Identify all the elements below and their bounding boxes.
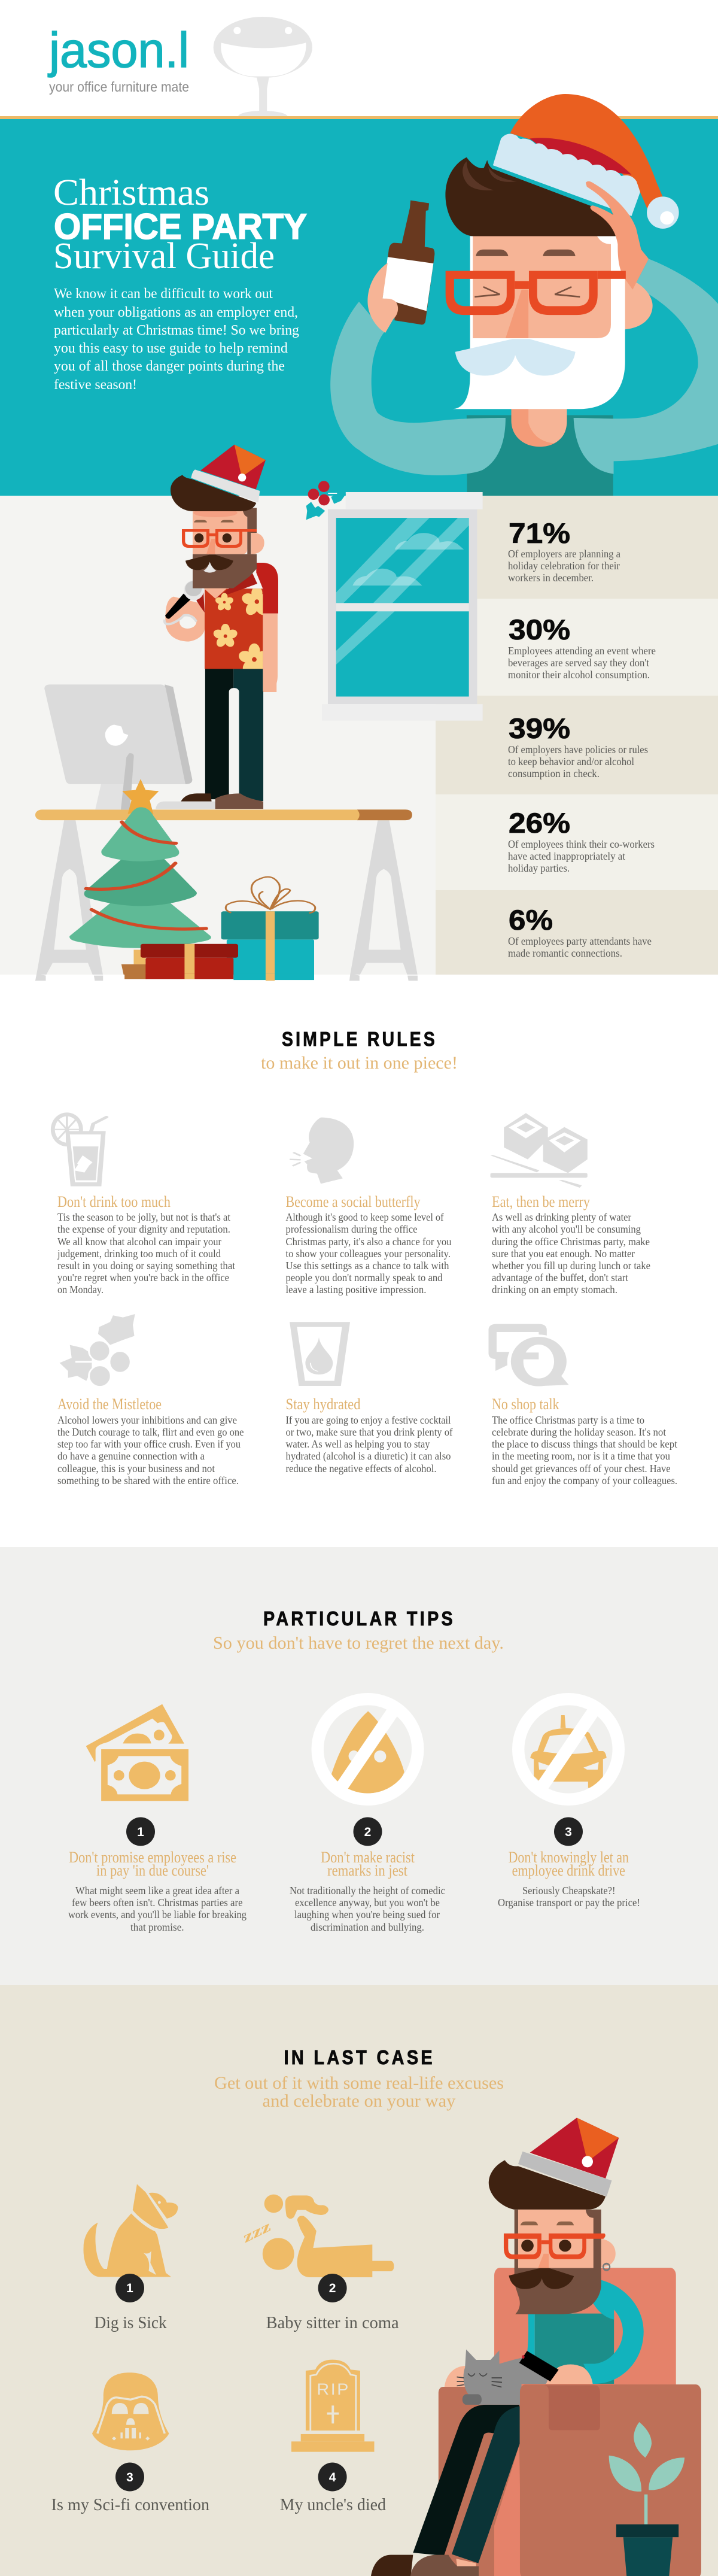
icon: glass of water <box>290 1322 350 1386</box>
number badge 1 <box>126 1818 155 1846</box>
icon: darth vader helmet <box>92 2372 169 2450</box>
stat: 71% <box>477 496 718 599</box>
text: don't drink too much <box>57 1193 235 1295</box>
heading: particular tips: So you don't have to regret the next day. <box>213 1633 504 1653</box>
stat: 6% <box>436 890 718 975</box>
hero intro paragraph: when your obligations as an employer end, <box>54 305 298 320</box>
text: eat, then be merry: during the office Christmas party, make <box>492 1236 650 1248</box>
hero intro paragraph <box>54 286 299 393</box>
text: no shop talk: fun and enjoy the company of your colleagues. <box>492 1474 677 1486</box>
text: don't promise a rise: work events, and you'll be liable for breaking <box>68 1909 247 1920</box>
text: become a social butterfly: people you don't normally speak to and <box>286 1272 443 1284</box>
hero: teal background <box>0 119 718 497</box>
prohibition ring <box>318 1699 418 1800</box>
icon: RIP gravestone: RIP <box>317 2380 348 2398</box>
text: become a social butterfly: to show your colleagues your personality. <box>286 1248 451 1260</box>
heading: simple rules <box>261 1028 458 1073</box>
text: no shop talk: The office Christmas party is a time to <box>492 1414 644 1426</box>
text: don't drink too much: you're regret when you're back in the office <box>57 1272 229 1284</box>
icon: no racist hood <box>318 1699 418 1800</box>
illustration: gift boxes <box>141 877 319 981</box>
text: avoid the mistletoe: something to be shared with the entire office. <box>57 1474 239 1486</box>
illustration: man with microphone <box>165 445 278 809</box>
text: no shop talk: the place to discuss things that should be kept <box>492 1438 677 1450</box>
heading: simple rules: SIMPLE RULES <box>282 1028 437 1050</box>
icon: cocktail <box>51 1112 107 1187</box>
section: particular tips <box>0 1547 718 1985</box>
text: avoid the mistletoe: step too far with your office crush. Even if you <box>57 1438 241 1450</box>
text: don't drink too much: the expense of your dignity and reputation. <box>57 1223 230 1235</box>
text: no shop talk: should get grievances off of your chest. Have <box>492 1463 671 1474</box>
stat: 30%: 30% <box>509 614 570 645</box>
text: become a social butterfly: professionalism during the office <box>286 1223 418 1235</box>
header divider: gold stripe <box>0 116 718 119</box>
text: stay hydrated: reduce the negative effects of alcohol. <box>286 1463 437 1474</box>
text: avoid the mistletoe: Avoid the Mistletoe <box>57 1395 162 1413</box>
illustration: window <box>322 492 483 721</box>
text: don't promise a rise: few beers often isn't. Christmas parties are <box>72 1897 243 1909</box>
hero title <box>53 172 307 277</box>
text: become a social butterfly: Although it's good to keep some level of <box>286 1211 444 1223</box>
hero intro paragraph: festive season! <box>54 377 137 393</box>
heading: particular tips: PARTICULAR TIPS <box>263 1607 455 1630</box>
icon: mistletoe <box>60 1314 135 1386</box>
icon: baby sitter in coma: zzz <box>239 2219 274 2246</box>
text: don't make racist remarks: remarks in jest <box>327 1862 408 1879</box>
heading: in last case <box>214 2046 504 2111</box>
stat: 6%: 6% <box>509 904 553 936</box>
stat: 71%: 71% <box>509 517 570 549</box>
stat: 71%: holiday celebration for their <box>508 560 620 572</box>
text: become a social butterfly: Use this settings as a chance to talk with <box>286 1260 449 1272</box>
text: don't promise a rise <box>68 1849 247 1933</box>
number badge: gravestone: 4 <box>329 2471 336 2484</box>
stat: 39%: consumption in check. <box>508 767 600 779</box>
text: don't drink too much: Tis the season to be jolly, but not is that's at <box>57 1211 230 1223</box>
stat: 71%: workers in december. <box>508 572 594 584</box>
text: don't promise a rise: What might seem like a great idea after a <box>75 1885 239 1897</box>
text: eat, then be merry: advantage of the buffet, don't start <box>492 1272 628 1284</box>
text: don't drink too much: We all know that alcohol can impair your <box>57 1236 221 1248</box>
logo: jason.l wordmark: jason.l <box>47 22 189 78</box>
text: don't drink too much: judgement, drinking too much of it could <box>57 1248 221 1260</box>
text: eat, then be merry <box>492 1193 650 1295</box>
heading: in last case: and celebrate on your way <box>262 2091 456 2111</box>
illustration: desk <box>35 809 418 979</box>
hero title: Christmas <box>53 172 209 213</box>
illustration: computer monitor <box>44 684 226 809</box>
text: don't let employee drink drive: Don't knowingly let an <box>509 1849 629 1866</box>
label: sci-fi convention: Is my Sci-fi convention <box>51 2496 209 2514</box>
text: don't make racist remarks: laughing when you're being sued for <box>294 1909 440 1920</box>
text: don't drink too much: Don't drink too much <box>57 1193 171 1210</box>
car shape <box>530 1715 607 1788</box>
re-drawn base of gifts and desk overlapping the section edge <box>35 974 418 981</box>
stat: 71%: Of employers are planning a <box>508 548 620 560</box>
stats panel <box>436 496 718 975</box>
text: don't make racist remarks <box>290 1849 445 1933</box>
section: in last case <box>0 1985 718 2576</box>
text: don't let employee drink drive: Seriously Cheapskate?! <box>522 1885 615 1897</box>
text: don't let employee drink drive <box>498 1849 640 1909</box>
header: white band <box>0 0 718 116</box>
hero intro paragraph: you of all those danger points during the <box>54 359 285 374</box>
hero title: Survival Guide <box>53 236 275 277</box>
label: dig is sick: Dig is Sick <box>95 2314 167 2332</box>
hood shape <box>331 1711 404 1794</box>
number badge 3 <box>554 1818 583 1846</box>
number badge: vader: 3 <box>126 2471 133 2484</box>
icon: talking head <box>290 1118 354 1184</box>
icon: RIP gravestone <box>291 2360 375 2452</box>
text: no shop talk: No shop talk <box>492 1395 559 1413</box>
stat: 6%: Of employees party attendants have <box>508 935 652 947</box>
number badge: baby sitter: 2 <box>329 2281 336 2295</box>
illustration: Christmas tree <box>69 779 211 979</box>
text: become a social butterfly: Become a social butterfly <box>286 1193 420 1210</box>
text: no shop talk: celebrate during the holiday season. It's not <box>492 1426 666 1438</box>
scene: office background <box>0 496 718 975</box>
label: baby sitter in coma: Baby sitter in coma <box>266 2314 399 2332</box>
upper body: head, hat, shirt and microphone <box>165 445 278 691</box>
heading: in last case: IN LAST CASE <box>284 2046 435 2068</box>
text: eat, then be merry: with any alcohol you'll be consuming <box>492 1223 641 1235</box>
text: don't make racist remarks: Don't make racist <box>321 1849 415 1866</box>
stat: 39%: Of employers have policies or rules <box>508 744 648 755</box>
stat: 26%: have acted inappropriately at <box>508 850 625 862</box>
stat: 26%: 26% <box>509 807 570 839</box>
prohibition ring <box>518 1699 619 1800</box>
number badge: gravestone <box>318 2463 347 2492</box>
text: eat, then be merry: whether you fill up during lunch or take <box>492 1260 650 1272</box>
text: no shop talk: in the meeting room, nor is it a time that you <box>492 1450 670 1462</box>
text: eat, then be merry: Eat, then be merry <box>492 1193 590 1210</box>
text: avoid the mistletoe: the Dutch courage to talk, flirt and even go one <box>57 1426 244 1438</box>
stat: 30%: monitor their alcohol consumption. <box>508 669 650 681</box>
number badge: dog: 1 <box>126 2281 133 2295</box>
heading: particular tips <box>213 1607 504 1653</box>
number badge: baby sitter <box>318 2274 347 2302</box>
label: my uncle's died: My uncle's died <box>280 2496 386 2514</box>
text: eat, then be merry: sure that you eat enough. No matter <box>492 1248 635 1260</box>
stat: 26%: Of employees think their co-workers <box>508 838 655 850</box>
text: no shop talk <box>492 1395 677 1486</box>
text: stay hydrated <box>286 1395 453 1474</box>
text: don't drink too much: on Monday. <box>57 1284 104 1295</box>
text: don't promise a rise: that promise. <box>130 1921 184 1933</box>
heading: simple rules: to make it out in one piece! <box>261 1053 458 1073</box>
hero title: OFFICE PARTY <box>54 207 307 247</box>
text: eat, then be merry: As well as drinking plenty of water <box>492 1211 631 1223</box>
character: santa hipster with beer bottle <box>330 94 718 500</box>
hero intro paragraph: We know it can be difficult to work out <box>54 286 273 302</box>
number badge 3: 3 <box>565 1825 572 1839</box>
text: eat, then be merry: drinking on an empty stomach. <box>492 1284 617 1295</box>
number badge 2 <box>353 1818 382 1846</box>
stat: 30%: beverages are served say they don't <box>508 657 649 669</box>
text: don't make racist remarks: Not traditionally the height of comedic <box>290 1885 445 1897</box>
icon: banknotes <box>86 1704 188 1801</box>
hero intro paragraph: particularly at Christmas time! So we bring <box>54 323 299 338</box>
text: stay hydrated: Stay hydrated <box>286 1395 360 1413</box>
text: avoid the mistletoe <box>57 1395 244 1486</box>
text: don't make racist remarks: excellence anyway, but you won't be <box>295 1897 440 1909</box>
stat: 39%: to keep behavior and/or alcohol <box>508 755 634 767</box>
number badge 1: 1 <box>137 1825 144 1839</box>
stat: 39%: 39% <box>509 712 570 744</box>
text: stay hydrated: or two, make sure that you drink plenty of <box>286 1426 453 1438</box>
stat: 30%: Employees attending an event where <box>508 645 656 657</box>
icon: sick dog <box>83 2184 178 2277</box>
text: stay hydrated: water. As well as helping you to stay <box>286 1438 430 1450</box>
number badge: dog <box>115 2274 144 2302</box>
heading: in last case: Get out of it with some real-life excuses <box>214 2073 504 2093</box>
icon: sushi rolls and chopsticks <box>491 1113 588 1188</box>
text: avoid the mistletoe: colleague, this is your business and not <box>57 1463 215 1474</box>
text: become a social butterfly: Christmas party, it's also a chance for you <box>286 1236 452 1248</box>
icon: grey egg chair <box>214 17 312 116</box>
text: don't let employee drink drive: employee drink drive <box>512 1862 625 1879</box>
text: don't promise a rise: Don't promise employees a rise <box>69 1849 236 1866</box>
number badge: vader <box>115 2463 144 2492</box>
text: don't drink too much: result in you doing or saying something that <box>57 1260 235 1272</box>
text: become a social butterfly: leave a lasting positive impression. <box>286 1284 426 1295</box>
stat: 39% <box>436 696 718 794</box>
text: don't make racist remarks: discrimination and bullying. <box>311 1921 424 1933</box>
text: stay hydrated: hydrated (alcohol is a diuretic) it can also <box>286 1450 451 1462</box>
section: simple rules <box>0 974 718 1547</box>
text: stay hydrated: If you are going to enjoy a festive cocktail <box>286 1414 451 1426</box>
illustration: man in armchair with cat <box>371 2117 701 2576</box>
number badge 2: 2 <box>364 1825 371 1839</box>
stat: 6%: made romantic connections. <box>508 947 622 959</box>
icon: no drink driving <box>518 1699 619 1800</box>
icon: holly on window <box>306 481 346 520</box>
stat: 26% <box>436 794 718 890</box>
text: don't let employee drink drive: Organise transport or pay the price! <box>498 1897 640 1909</box>
hero intro paragraph: you this easy to use guide to help remind <box>54 341 288 356</box>
stat: 30% <box>477 599 718 696</box>
text: don't promise a rise: in pay 'in due course' <box>96 1862 209 1879</box>
icon: speech bubbles <box>488 1324 570 1389</box>
text: become a social butterfly <box>286 1193 452 1295</box>
text: avoid the mistletoe: Alcohol lowers your inhibitions and can give <box>57 1414 237 1426</box>
stat: 26%: holiday parties. <box>508 862 570 874</box>
icon: baby sitter in coma <box>239 2195 394 2277</box>
text: avoid the mistletoe: do have a genuine connection with a <box>57 1450 205 1462</box>
lower body: trousers and shoes <box>181 661 276 809</box>
logo: jason.l wordmark: your office furniture mate <box>49 79 189 95</box>
